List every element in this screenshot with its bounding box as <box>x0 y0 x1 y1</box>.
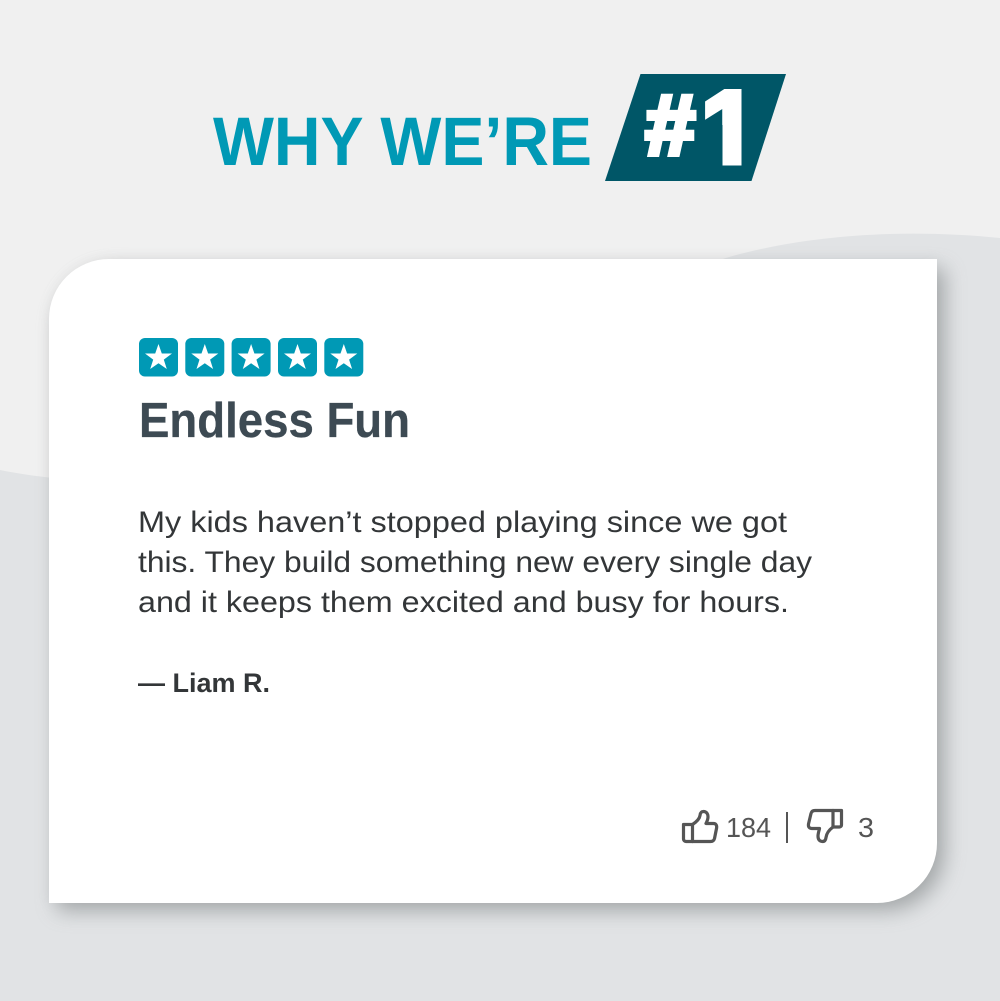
icon: thumbs down <box>808 810 842 842</box>
review body: My kids haven’t stopped playing since we got <box>138 506 788 539</box>
divider <box>786 812 788 843</box>
down count: 3 <box>858 812 874 843</box>
number one badge: # <box>644 78 695 174</box>
icon: thumbs up <box>684 812 717 842</box>
review body: and it keeps them excited and busy for hours. <box>138 586 789 619</box>
panel: review card <box>49 259 937 903</box>
title text: WHY WE’RE <box>213 103 592 180</box>
votes <box>684 810 874 843</box>
review heading: Endless Fun <box>139 394 410 448</box>
card halo <box>49 259 937 903</box>
star rating <box>139 338 363 376</box>
title <box>213 70 786 186</box>
reviewer name: — Liam R. <box>138 668 270 698</box>
card shadow <box>57 269 945 911</box>
review body <box>138 506 812 619</box>
number one badge <box>605 70 786 186</box>
number one badge: 1 <box>701 70 759 186</box>
up count: 184 <box>726 812 771 843</box>
background wave <box>0 234 1000 1001</box>
review body: this. They build something new every single day <box>138 546 812 579</box>
